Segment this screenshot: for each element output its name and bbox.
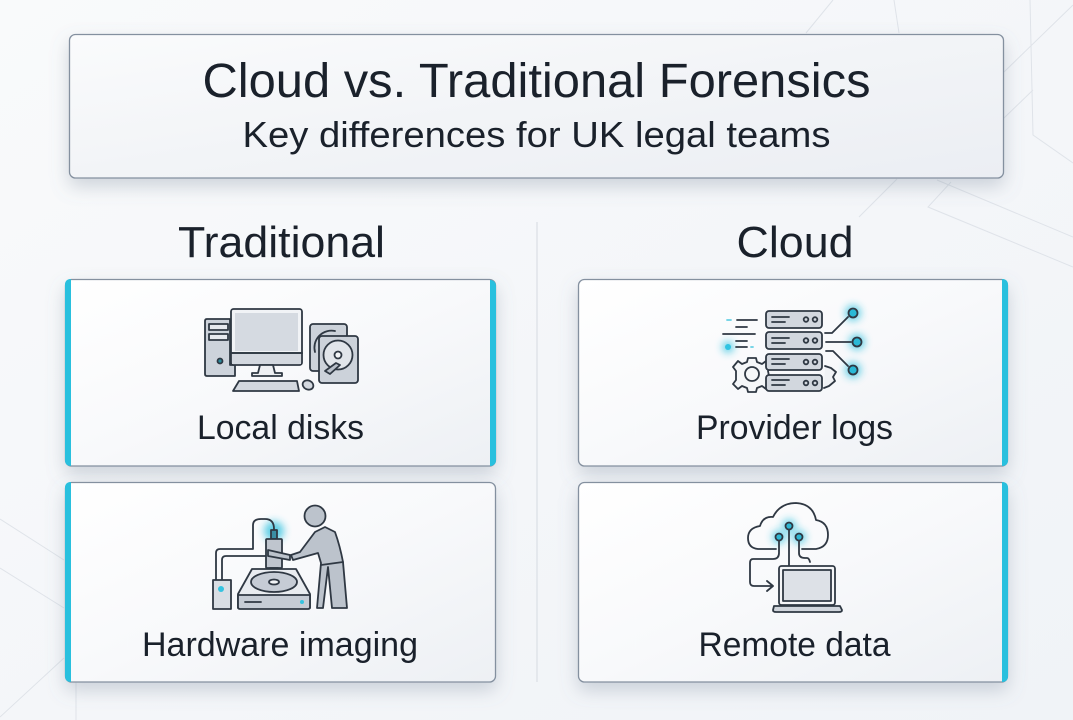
icon: cloud connected to laptop — [748, 503, 842, 612]
panel: provider logs — [578, 279, 1008, 466]
panel: local disks — [65, 279, 496, 466]
panel: hardware imaging — [65, 482, 496, 682]
label: Provider logs — [696, 409, 893, 447]
icon: server stack with nodes — [722, 305, 865, 392]
label: Local disks — [197, 409, 364, 447]
column divider — [536, 222, 538, 682]
icon: disk imaging station with operator — [213, 506, 347, 609]
heading: Traditional: Traditional — [178, 218, 385, 267]
header panel — [70, 34, 1004, 178]
heading: Cloud: Cloud — [736, 218, 854, 267]
panel: remote data — [578, 482, 1008, 682]
icon: computer and hard disks — [205, 309, 358, 391]
title: Cloud vs. Traditional Forensics — [202, 55, 870, 108]
subtitle: Key differences for UK legal teams — [242, 114, 830, 155]
label: Remote data — [698, 626, 891, 664]
label: Hardware imaging — [142, 626, 418, 664]
